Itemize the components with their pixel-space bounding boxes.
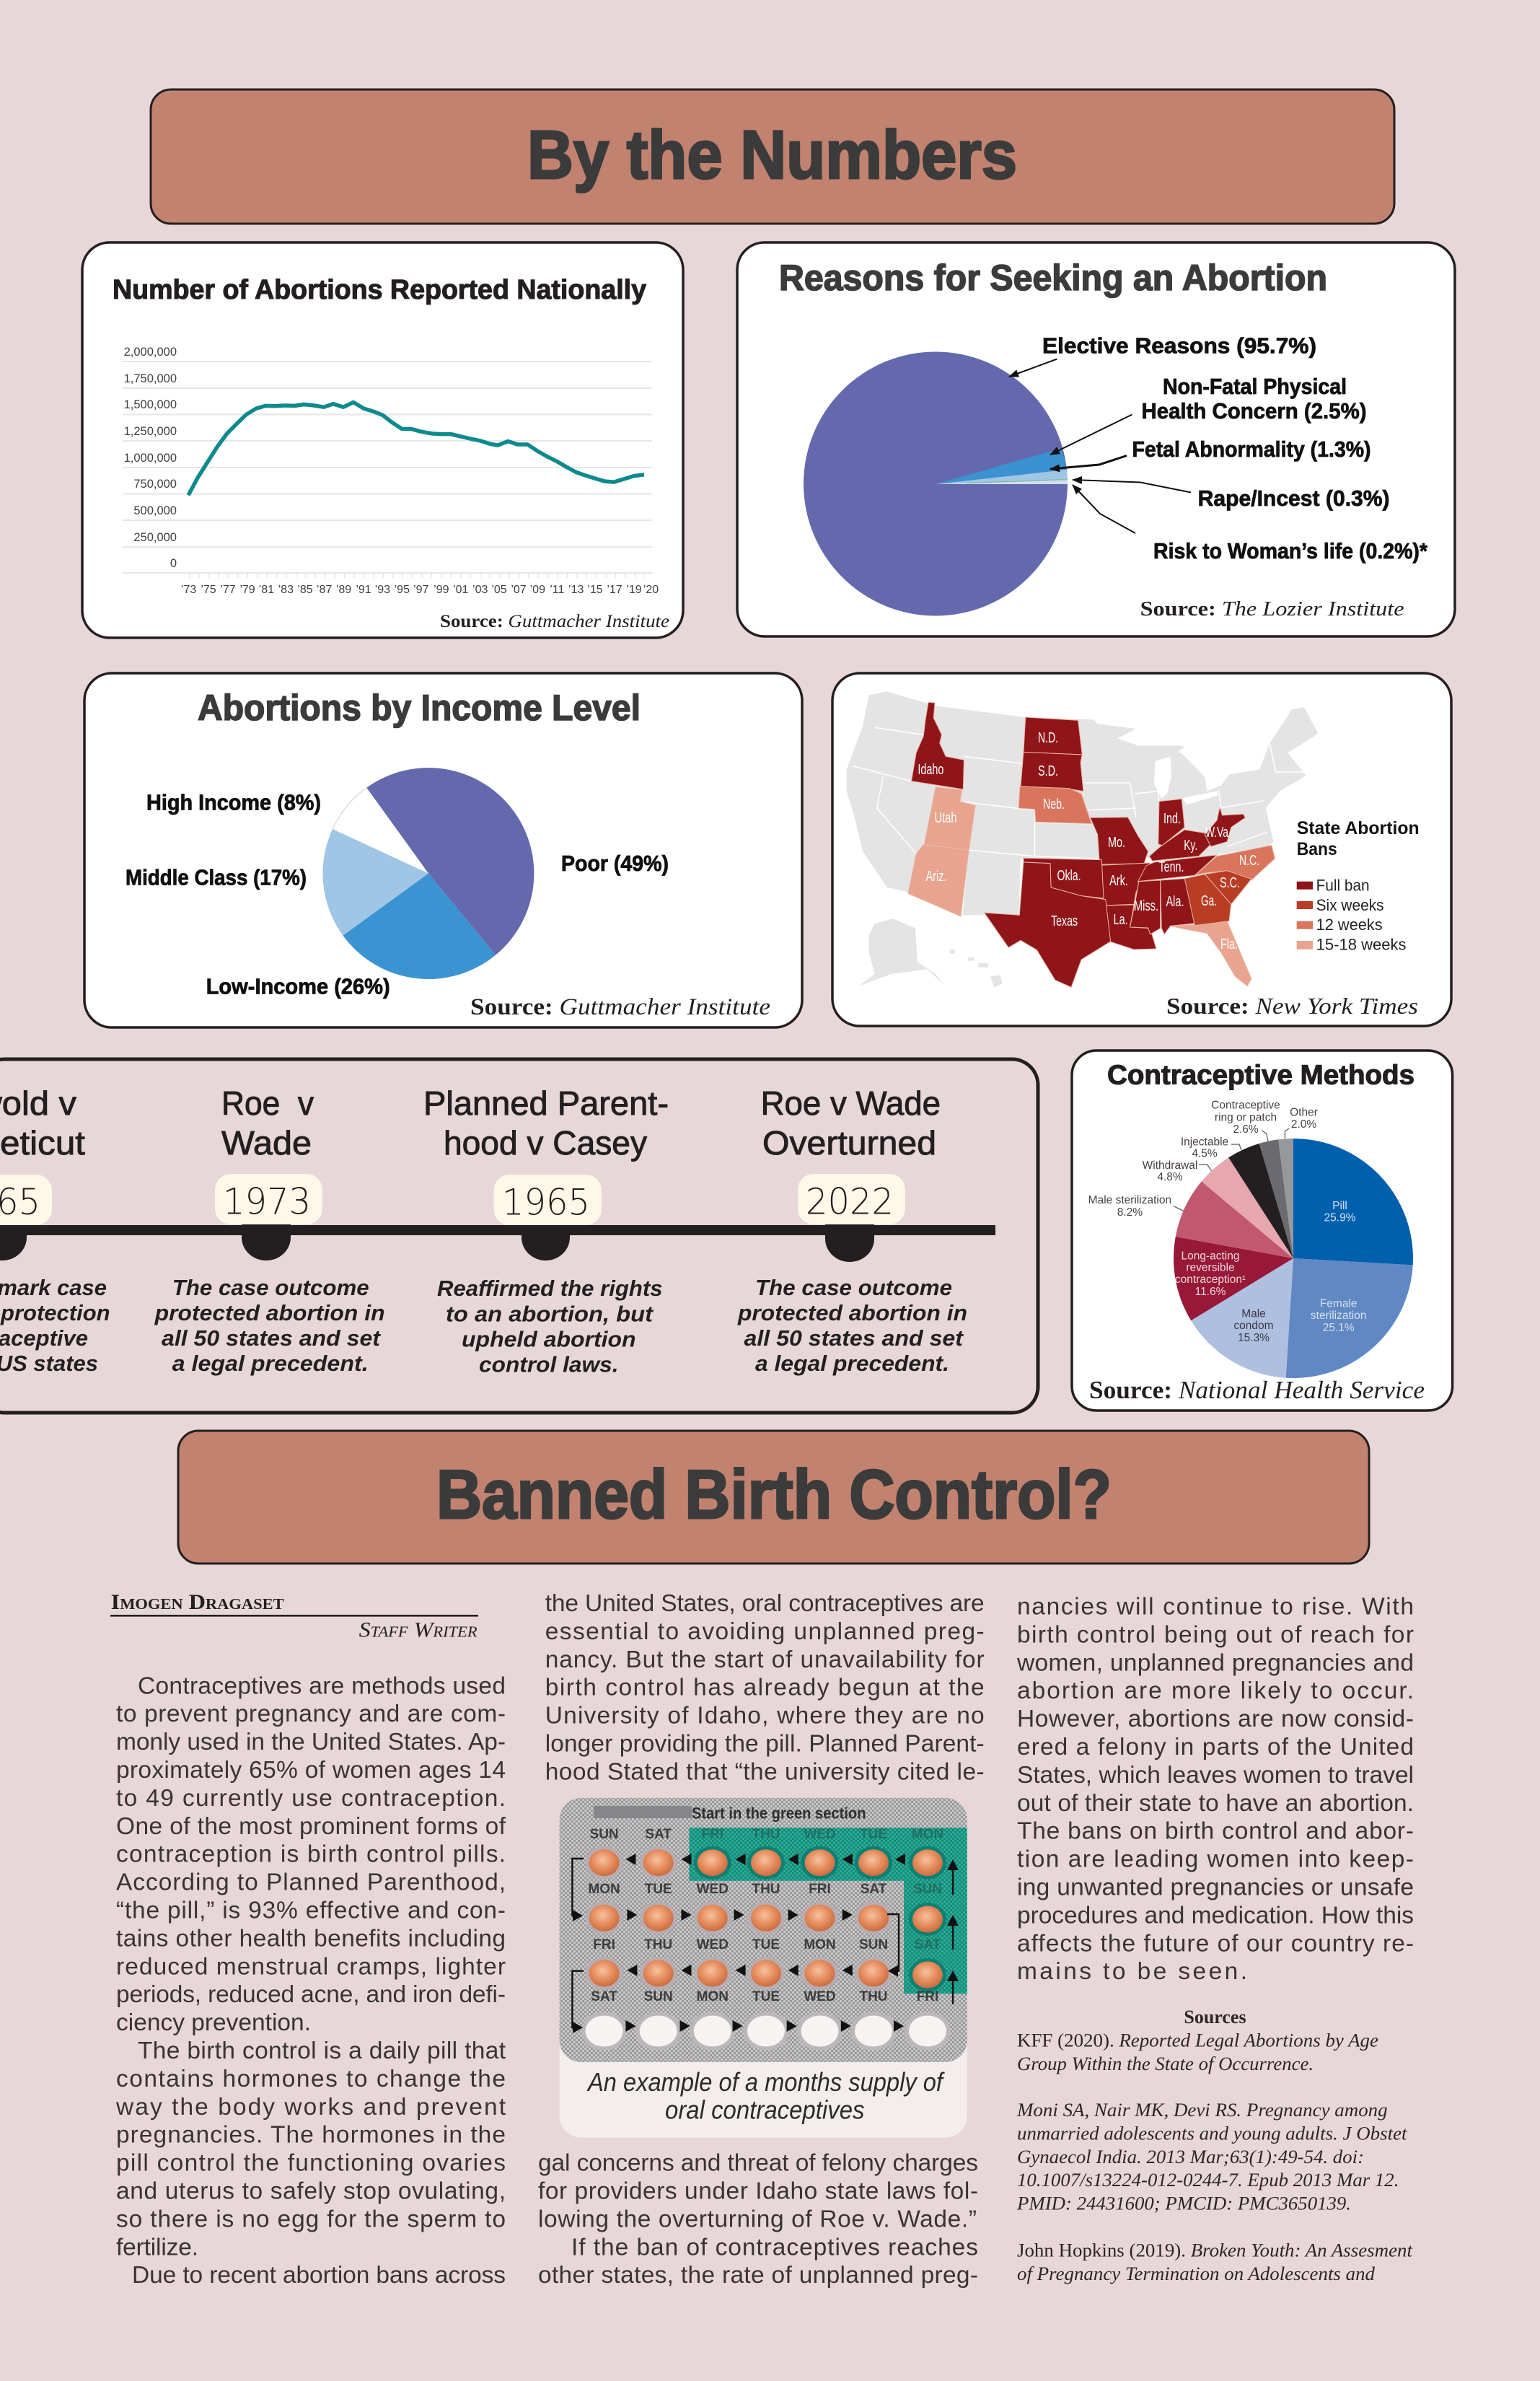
sources list: KFF (2020). Reported Legal Abortions by Age [1017,2030,1378,2051]
state labels: Ala. [1166,894,1184,910]
title: Banned Birth Control?: Banned Birth Control? [436,1456,1112,1533]
pie labels: ring or patch [1215,1111,1277,1123]
y axis labels [124,346,177,570]
pie labels [126,790,669,999]
map legend: 12 weeks [1316,916,1383,934]
event: Roe v Wade: The case outcome [172,1275,369,1300]
pie labels: Pill [1332,1200,1347,1212]
y axis labels: 1,500,000 [124,398,177,411]
pill pack day labels: THU [859,1989,888,2004]
pill pack day labels: TUE [752,1989,780,2004]
arrows [1009,359,1191,533]
event: Roe v Wade Overturned: The case outcome [755,1275,952,1300]
event: Griswold v Conneticut [0,1084,110,1376]
pie labels: High Income (8%) [146,790,321,815]
event: Roe v Wade: 1973 [223,1181,311,1223]
pie labels: Risk to Woman’s life (0.2%)* [1153,538,1428,564]
y axis labels: 250,000 [133,531,177,544]
state labels: Tenn. [1158,859,1184,875]
x axis labels: ’01 [453,584,468,596]
x axis labels: ’77 [220,584,236,596]
x axis labels: ’89 [336,584,351,596]
event: Planned Parenthood v Casey: 1965 [502,1181,590,1223]
state labels: S.C. [1220,875,1240,891]
pie labels: 15.3% [1238,1332,1270,1344]
source: Source: Guttmacher Institute [440,612,669,631]
chart gridlines [123,361,652,576]
pie labels [1088,1100,1366,1344]
pie labels: Rape/Incest (0.3%) [1198,486,1390,511]
pie labels: Long-acting [1181,1250,1240,1263]
x axis labels: ’87 [317,584,332,596]
map legend: Full ban [1316,876,1370,894]
pill pack day labels: TUE [860,1827,887,1842]
state labels: Ark. [1109,873,1128,889]
x axis labels: ’15 [587,584,603,596]
pie chart: contraceptive methods [1174,1139,1413,1378]
pie labels: 4.8% [1157,1171,1183,1183]
pie labels: Fetal Abnormality (1.3%) [1132,437,1370,462]
source: Source: Guttmacher Institute [470,994,770,1020]
sources list: John Hopkins (2019). Broken Youth: An Assesment [1017,2240,1413,2261]
pie labels: Health Concern (2.5%) [1141,398,1366,424]
sources list: 10.1007/s13224-012-0244-7. Epub 2013 Mar 12. [1017,2170,1399,2191]
article column 1: fertilize. [116,2234,198,2261]
data line [188,403,644,495]
heading: Reasons for Seeking an Abortion: Reasons for Seeking an Abortion [779,258,1327,298]
sources list: Gynaecol India. 2013 Mar;63(1):49-54. doi: [1017,2147,1364,2167]
pill pack foil [560,1798,967,2062]
map legend [1297,818,1420,954]
state labels: Ga. [1201,893,1217,909]
pie labels: Poor (49%) [561,851,669,876]
map legend: 15-18 weeks [1316,936,1407,954]
article column 1: One of the most prominent forms of [116,1813,506,1840]
x axis labels: ’17 [607,584,622,596]
article column 2 bottom: other states, the rate of unplanned preg- [538,2262,978,2289]
event: Roe v Wade Overturned [737,1084,967,1376]
article column 2 bottom: for providers under Idaho state laws fol- [538,2178,978,2205]
sources list: Group Within the State of Occurrence. [1017,2053,1314,2074]
article column 2 bottom [538,2150,978,2289]
article column 1: periods, reduced acne, and iron defi- [116,1981,506,2008]
article column 1 [115,1672,506,2289]
byline: Imogen Dragaset [111,1590,284,1614]
pill pack day labels: WED [804,1827,836,1842]
pill pack day labels: WED [804,1989,836,2004]
article column 1: “the pill,” is 93% effective and con- [116,1898,506,1924]
pie chart: reasons [804,352,1068,616]
panel: number of abortions line chart [82,242,683,638]
pill pack day labels: SUN [859,1937,888,1952]
x axis labels: ’20 [643,584,659,596]
article column 2 bottom: lowing the overturning of Roe v. Wade.” [538,2206,977,2232]
article column 1: so there is no egg for the sperm to [116,2206,506,2232]
article column 2 top: the United States, oral contraceptives are [545,1590,985,1617]
map legend: State Abortion [1297,818,1420,838]
pie labels: reversible [1186,1262,1235,1274]
article column 3: mains to be seen. [1017,1958,1247,1985]
event: Roe v Wade: all 50 states and set [162,1325,382,1351]
pie labels: Male sterilization [1088,1194,1171,1206]
pill pack day labels: TUE [645,1882,672,1897]
article column 2 top: essential to avoiding unplanned preg- [545,1618,985,1645]
pie labels: Female [1320,1298,1358,1310]
state labels: Utah [935,810,956,826]
state labels [918,730,1259,952]
pill pack day labels: THU [644,1937,672,1952]
article column 1: reduced menstrual cramps, lighter [116,1953,506,1980]
y axis labels: 1,000,000 [124,452,177,465]
panel: abortions by income level [84,673,802,1027]
article column 1: and uterus to safely stop ovulating, [116,2178,506,2205]
pie labels: condom [1233,1320,1274,1332]
state labels: N.C. [1239,853,1259,869]
article column 1: ciency prevention. [116,2009,311,2036]
x axis labels: ’05 [491,584,507,596]
event: Roe v Wade [154,1084,385,1376]
article column 3: States, which leaves women to travel [1017,1762,1414,1789]
panel: state abortion bans map [832,673,1451,1026]
map legend: Bans [1297,839,1337,859]
pill pack day labels: FRI [701,1827,723,1842]
article column 3: abortion are more likely to occur. [1017,1678,1414,1704]
event: Roe v Wade Overturned: a legal precedent. [755,1351,949,1376]
state labels: Miss. [1134,898,1158,914]
x axis labels: ’91 [356,584,371,596]
state labels: La. [1114,912,1128,928]
state labels: Ky. [1184,838,1197,854]
map legend: Six weeks [1316,896,1384,914]
state labels: Okla. [1057,868,1081,884]
state labels: Ind. [1163,811,1181,827]
article column 2 bottom: gal concerns and threat of felony charges [538,2150,978,2177]
pills [581,1846,951,2051]
byline: Staff Writer [359,1618,478,1642]
sources list: unmarried adolescents and young adults. J Obstet [1017,2123,1407,2144]
event: Planned Parenthood v Casey: upheld abortion [462,1327,636,1352]
state labels: S.D. [1038,763,1058,779]
article column 1: proximately 65% of women ages 14 [116,1757,506,1784]
event: Roe v Wade: a legal precedent. [172,1351,369,1376]
pie labels: Male [1241,1308,1266,1320]
article column 3: out of their state to have an abortion. [1017,1790,1414,1817]
pill pack day labels: TUE [752,1937,780,1952]
article column 3: women, unplanned pregnancies and [1016,1649,1414,1676]
state labels: Idaho [918,762,943,778]
event: Roe v Wade Overturned: all 50 states and set [744,1325,964,1351]
pill pack day labels: SUN [644,1989,673,2004]
pie labels: 2.6% [1233,1123,1259,1136]
y axis labels: 2,000,000 [124,346,177,359]
pill pack day labels: FRI [593,1937,615,1952]
y axis labels: 0 [170,557,177,570]
pie labels: 25.9% [1324,1212,1356,1224]
y axis labels: 1,750,000 [124,372,177,385]
pill pack day labels: WED [697,1937,729,1952]
x axis labels: ’09 [530,584,545,596]
article column 1: pregnancies. The hormones in the [116,2122,506,2149]
article column 2 top: nancy. But the start of unavailability for [545,1646,985,1673]
event: Roe v Wade: protected abortion in [154,1300,385,1325]
pie labels: Contraceptive [1211,1100,1280,1112]
pie labels: Elective Reasons (95.7%) [1042,333,1316,358]
pill pack day labels: WED [697,1882,729,1897]
pie labels: Withdrawal [1143,1159,1197,1172]
sources list: Moni SA, Nair MK, Devi RS. Pregnancy among [1016,2100,1388,2121]
x axis labels: ’99 [434,584,449,596]
article column 3: However, abortions are now consid- [1017,1706,1414,1732]
article column 2 top: longer providing the pill. Planned Parent- [545,1730,985,1758]
article column 1: Due to recent abortion bans across [132,2262,506,2289]
article column 2 top [545,1590,985,1785]
event: Planned Parenthood v Casey: hood v Casey [444,1124,647,1162]
sources list [1016,2007,1413,2284]
photo: birth control pill pack with caption [560,1798,967,2138]
article column 1: monly used in the United States. Ap- [116,1729,506,1755]
header: Banned Birth Control? [178,1431,1369,1564]
pie labels: Low-Income (26%) [206,974,390,999]
x axis labels: ’83 [278,584,294,596]
event: Roe v Wade Overturned: Overturned [762,1124,936,1162]
event: Roe v Wade: Roe v [221,1084,314,1122]
article column 3: birth control being out of reach for [1017,1621,1414,1648]
source: Source: The Lozier Institute [1140,597,1404,621]
event: Roe v Wade Overturned: Roe v Wade [761,1084,941,1122]
article column 3: ered a felony in parts of the United [1017,1734,1414,1760]
leader lines [1174,1128,1289,1211]
state labels: Mo. [1108,835,1125,851]
pie labels: Other [1290,1107,1318,1119]
x axis labels: ’97 [413,584,428,596]
panel: contraceptive methods [1072,1051,1453,1411]
y axis labels: 750,000 [133,478,177,491]
heading: Contraceptive Methods: Contraceptive Methods [1107,1061,1414,1091]
article column 1: contraception is birth control pills. [116,1841,506,1868]
pill pack day labels: MON [697,1989,729,2004]
pie labels: 25.1% [1323,1322,1355,1334]
title: By the Numbers: By the Numbers [527,117,1017,193]
pill pack day labels [588,1827,943,2004]
pill pack day labels: FRI [917,1989,938,2004]
article column 1: contains hormones to change the [116,2066,506,2092]
photo caption: An example of a months supply of [586,2067,946,2097]
article column 3: procedures and medication. How this [1017,1902,1414,1929]
pill pack day labels: FRI [809,1882,831,1897]
photo caption [586,2067,946,2125]
state labels: Texas [1051,913,1078,929]
pie labels: 4.5% [1192,1147,1218,1159]
article column 1: tains other health benefits including [116,1925,506,1952]
x axis labels: ’95 [395,584,410,596]
article column 3: nancies will continue to rise. With [1017,1593,1414,1621]
sources list: PMID: 24431600; PMCID: PMC3650139. [1016,2193,1351,2214]
x axis labels: ’79 [239,584,255,596]
article column 3: ing unwanted pregnancies or unsafe [1017,1874,1414,1900]
pie labels: contraception¹ [1175,1273,1246,1286]
pie labels: 8.2% [1117,1206,1143,1219]
x axis labels: ’81 [259,584,274,596]
pill pack day labels: THU [752,1827,780,1842]
pill pack day labels: SAT [861,1882,887,1897]
pie labels: Middle Class (17%) [126,865,307,890]
event: Roe v Wade Overturned: 2022 [806,1181,894,1223]
y axis labels: 500,000 [133,504,177,517]
x axis labels: ’93 [375,584,390,596]
pill pack day labels: THU [752,1882,780,1897]
article column 2 top: University of Idaho, where they are no [545,1703,985,1729]
article column 2 top: birth control has already begun at the [545,1675,985,1701]
article column 3: affects the future of our country re- [1017,1930,1414,1957]
state labels: N.D. [1038,730,1058,746]
event: Planned Parenthood v Casey: Reaffirmed the rights [437,1276,663,1301]
pill pack day labels: SUN [913,1882,942,1897]
event: Roe v Wade Overturned: protected abortion in [737,1300,967,1325]
article column 1: Contraceptives are methods used [138,1672,506,1699]
panel: reasons for seeking an abortion [737,242,1455,636]
source: Source: New York Times [1166,993,1418,1019]
state labels: Ariz. [926,869,946,885]
state labels: Fla. [1220,937,1238,952]
event: Planned Parenthood v Casey: Planned Parent- [423,1084,669,1122]
y axis labels: 1,250,000 [124,425,177,438]
article column 3 [1016,1593,1414,1985]
x axis labels: ’19 [626,584,642,596]
x axis labels: ’85 [297,584,313,596]
pill pack day labels: SAT [915,1937,941,1952]
state labels: Neb. [1043,797,1065,812]
pie labels [1042,333,1428,564]
article column 1: way the body works and prevent [115,2094,506,2121]
timeline bar [0,1225,995,1235]
pie chart: income [322,768,534,979]
heading: Abortions by Income Level: Abortions by Income Level [198,688,641,728]
article column 1: pill control the functioning ovaries [116,2150,506,2177]
pie labels: sterilization [1311,1310,1366,1322]
x axis labels: ’13 [568,584,584,596]
panel: court case timeline [0,1059,1038,1413]
event: Roe v Wade: Wade [221,1124,312,1162]
pie labels: Non-Fatal Physical [1163,374,1347,399]
article column 1: to 49 currently use contraception. [116,1785,506,1812]
pie labels: 11.6% [1195,1286,1226,1298]
pill pack day labels: SAT [591,1989,617,2004]
article column 2 top: hood Stated that “the university cited le- [545,1758,985,1785]
source: Source: National Health Service [1089,1376,1425,1404]
pill pack day labels: MON [804,1937,836,1952]
pill pack day labels: SAT [645,1827,672,1842]
pill pack day labels: MON [588,1882,620,1897]
article column 2 bottom: If the ban of contraceptives reaches [571,2234,978,2261]
pill pack day labels: SUN [590,1827,619,1842]
article column 1: The birth control is a daily pill that [138,2038,506,2064]
x axis labels: ’03 [472,584,488,596]
photo caption: oral contraceptives [665,2095,864,2125]
event: Planned Parenthood v Casey [423,1084,669,1377]
x axis labels: ’73 [181,584,196,596]
x axis labels: ’11 [550,584,564,596]
article column 3: The bans on birth control and abor- [1017,1818,1414,1845]
event: Planned Parenthood v Casey: to an abortion, but [446,1302,654,1327]
photo: birth control pill pack with caption: Start in the green section [692,1805,866,1823]
pill pack day labels: MON [912,1827,943,1842]
article column 1: According to Planned Parenthood, [116,1869,506,1896]
state labels: W.Va [1205,825,1229,841]
byline [110,1590,478,1642]
x axis labels [181,584,659,596]
article column 3: tion are leading women into keep- [1017,1846,1414,1873]
article column 1: to prevent pregnancy and are com- [116,1701,506,1727]
heading: Number of Abortions Reported Nationally: Number of Abortions Reported Nationally [113,275,646,305]
pie labels: 2.0% [1291,1118,1316,1131]
sources list: Sources [1184,2007,1246,2027]
header: By the Numbers [151,89,1394,224]
x axis labels: ’07 [511,584,527,596]
event: Planned Parenthood v Casey: control laws. [479,1352,619,1377]
pie labels: Injectable [1181,1136,1228,1148]
sources list: of Pregnancy Termination on Adolescents and [1017,2263,1376,2284]
x axis labels: ’75 [201,584,216,596]
pack arrows [572,1854,959,2033]
map of the United States [847,691,1318,987]
